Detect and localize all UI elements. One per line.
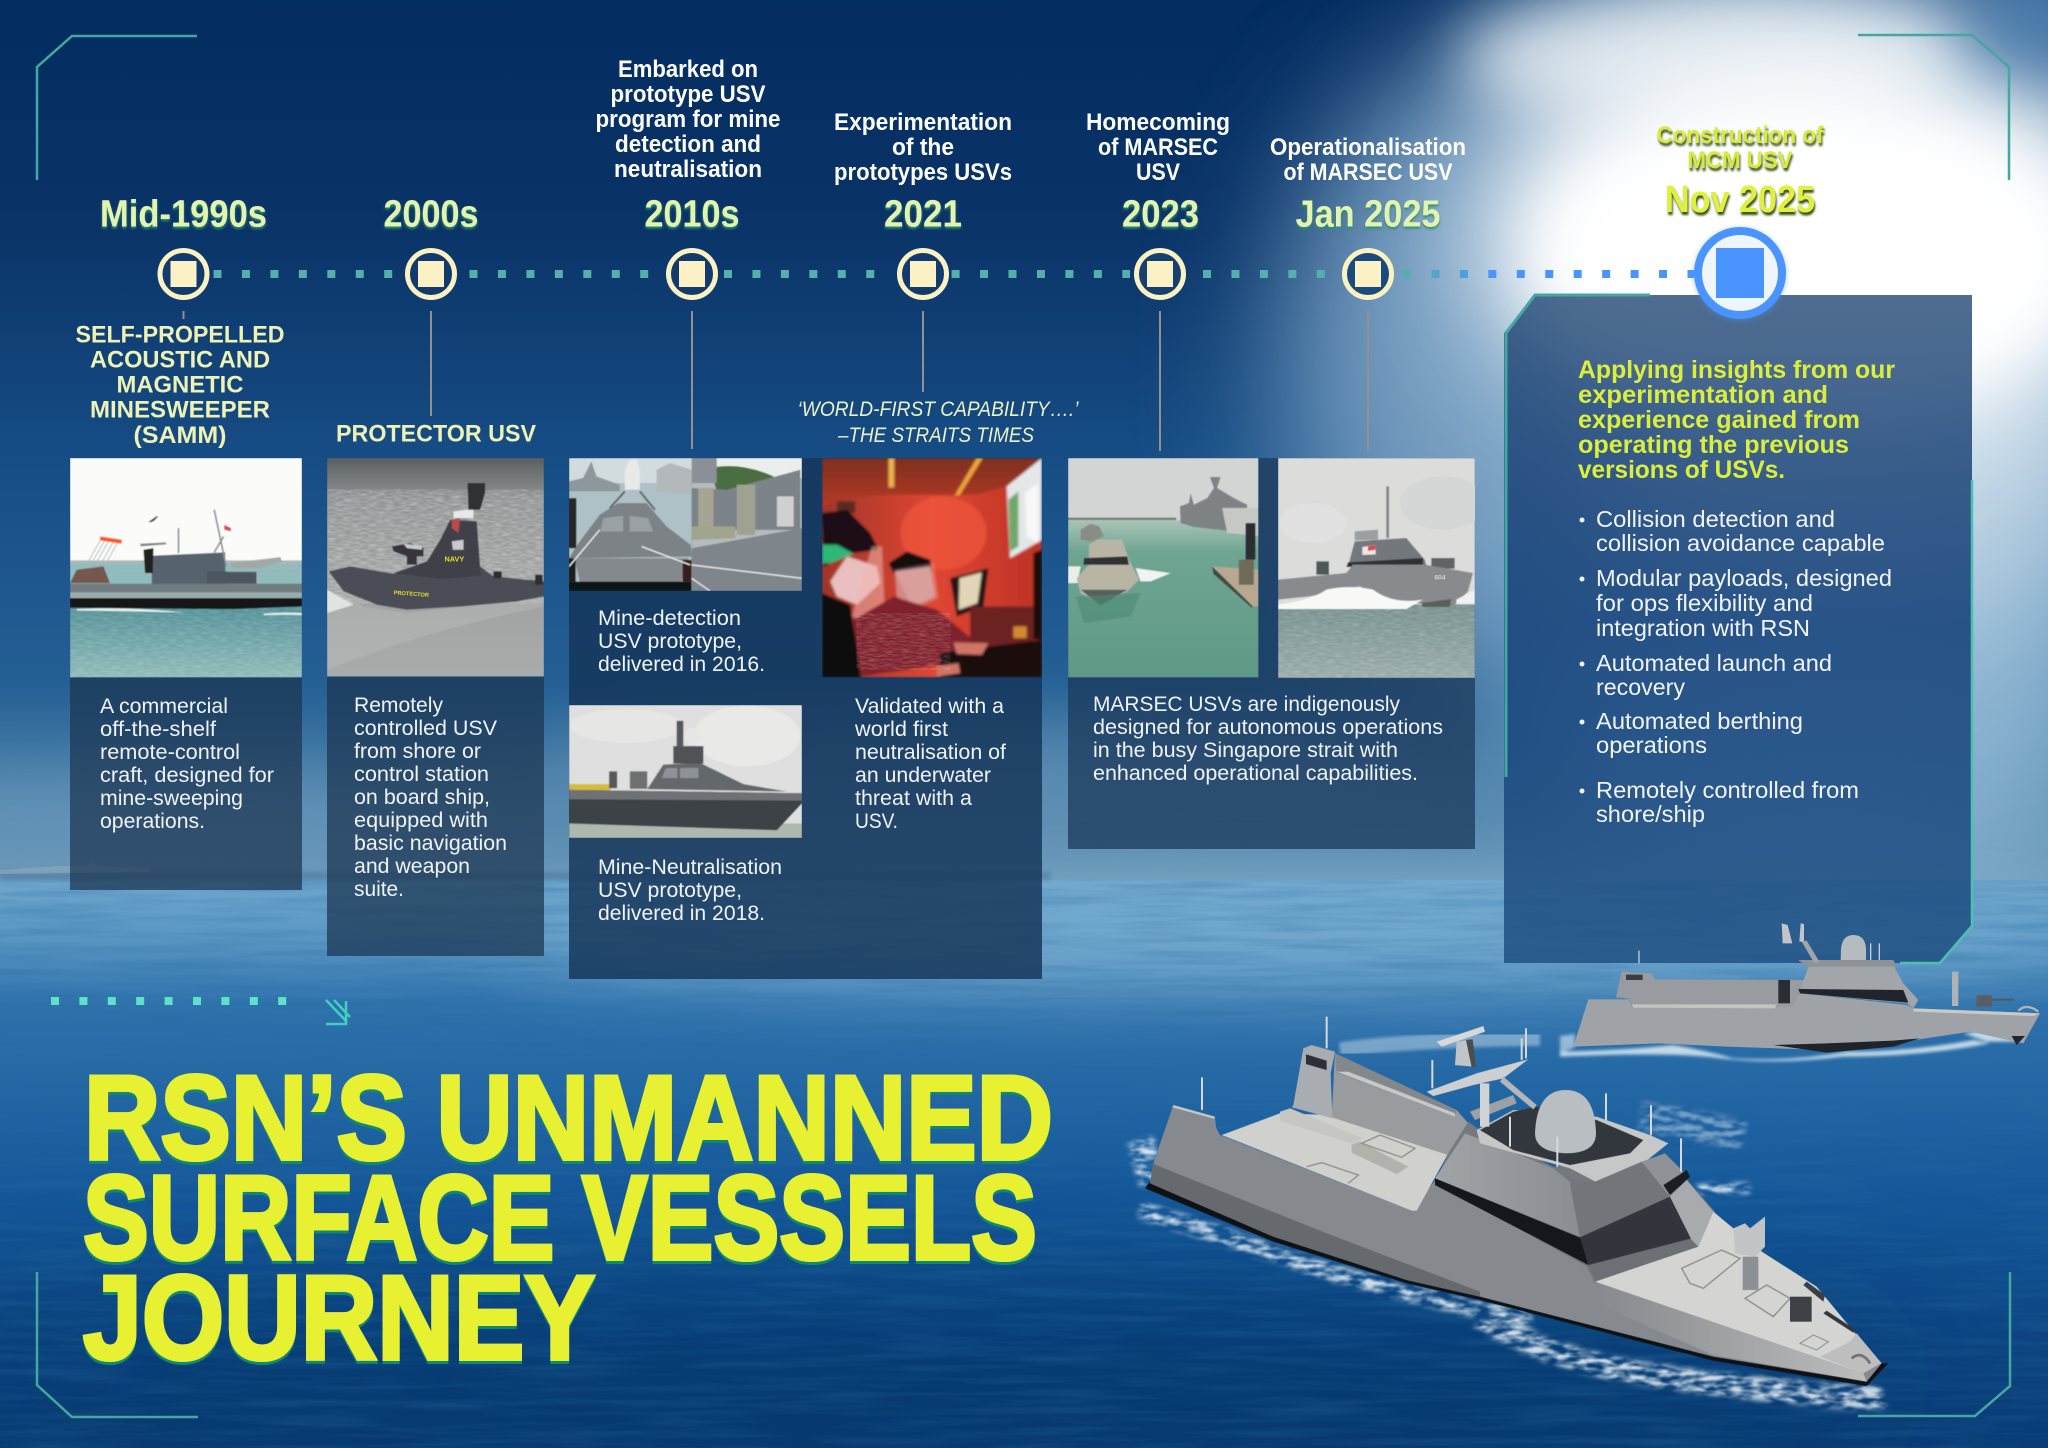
caption: Nov 2025: MCM USV [1688, 147, 1792, 174]
text: SAMM description: mine-sweeping [100, 787, 243, 810]
text: MARSEC description: enhanced operational capabilities. [1093, 762, 1418, 785]
caption: 2021: prototypes USVs [834, 159, 1012, 186]
text: 2021 validation: USV. [855, 810, 898, 833]
text: MCM USV intro: experience gained from [1578, 406, 1860, 434]
panel: mid-1990s text background [70, 677, 302, 890]
caption: 2010s: detection and [615, 131, 761, 158]
text: MCM USV intro [1578, 356, 1895, 484]
title: SURFACE VESSELS [83, 1151, 1037, 1285]
ship: rear MCM USV with wake [1560, 923, 2040, 1061]
caption: 2023: USV [1136, 159, 1180, 186]
text: SAMM description [100, 695, 274, 833]
year labels: 2021 [884, 194, 962, 236]
caption: 2021: of the [892, 134, 954, 161]
list: MCM USV capabilities: Modular payloads, designed [1596, 565, 1892, 591]
text: Protector description: on board ship, [354, 786, 490, 809]
photo: control room [822, 458, 1042, 678]
timeline node: Mid-1990s [160, 250, 207, 298]
timeline node: Nov 2025 [1693, 227, 1787, 321]
text: Protector description: basic navigation [354, 832, 507, 855]
caption: Jan 2025: of MARSEC USV [1284, 159, 1452, 186]
caption: 2010s: prototype USV [610, 81, 766, 108]
photo: SAMM minesweeper [70, 458, 302, 678]
text: 2021 validation: neutralisation of [855, 741, 1006, 764]
year labels: Jan 2025 [1296, 194, 1440, 236]
heading: SAMM: MINESWEEPER [90, 396, 270, 424]
caption: 2010s: program for mine [596, 106, 780, 133]
photo: Protector USV [327, 458, 544, 676]
text: Protector description [354, 694, 507, 901]
caption: Jan 2025 [1270, 134, 1466, 186]
list: MCM USV capabilities: shore/ship [1596, 801, 1705, 827]
caption: 2010s: neutralisation [614, 156, 762, 183]
timeline node: 2010s [668, 250, 716, 298]
text: mine-detection prototype: USV prototype, [598, 630, 742, 653]
list: MCM USV capabilities: Automated launch and [1596, 650, 1832, 676]
year labels: 2010s [644, 194, 740, 236]
list: MCM USV capabilities: for ops flexibility and [1596, 590, 1813, 616]
text: mine-neutralisation prototype: Mine-Neutralisation [598, 856, 782, 879]
photo: mine-detection USV prototype [569, 458, 802, 591]
photo: Protector USV: NAVY [444, 555, 464, 564]
text: SAMM description: A commercial [100, 695, 228, 718]
text: mine-detection prototype: delivered in 2016. [598, 653, 765, 676]
list: MCM USV capabilities: operations [1596, 732, 1707, 758]
list: MCM USV capabilities: integration with RSN [1596, 615, 1810, 641]
heading: SAMM: SELF-PROPELLED [76, 322, 284, 348]
text: SAMM description: craft, designed for [100, 764, 274, 787]
year labels: Nov 2025 [1665, 179, 1815, 221]
list: MCM USV capabilities [1580, 506, 1892, 827]
connector lines [184, 311, 1368, 451]
text: Protector description: control station [354, 763, 489, 786]
year labels [100, 179, 1815, 236]
list: MCM USV capabilities: Remotely controlled from [1596, 777, 1859, 803]
text: 2021 validation: threat with a [855, 787, 972, 810]
heading: Protector USV: PROTECTOR USV [336, 420, 536, 448]
text: MCM USV intro: Applying insights from our [1578, 356, 1895, 384]
text: 2021 validation: an underwater [855, 764, 991, 787]
panel: 2010s and 2021 background [569, 458, 1042, 979]
text: MCM USV intro: operating the previous [1578, 431, 1849, 459]
timeline node: 2000s [408, 250, 454, 298]
heading: SAMM: ACOUSTIC AND [90, 346, 270, 374]
heading: SAMM: (SAMM) [134, 422, 226, 449]
title: JOURNEY [83, 1251, 595, 1385]
year labels: Mid-1990s [100, 194, 267, 236]
caption: 2023: of MARSEC [1098, 134, 1218, 161]
panel: MCM USV [1504, 295, 1972, 963]
timeline node: 2021 [900, 250, 946, 298]
text: mine-neutralisation prototype: USV prototype, [598, 879, 742, 902]
photo: MARSEC USV underway [1278, 458, 1475, 678]
year labels: 2023 [1122, 194, 1199, 236]
quote: The Straits Times: ‘WORLD-FIRST CAPABILITY….’ [798, 398, 1079, 421]
heading: SAMM [76, 322, 284, 449]
quote: The Straits Times: –THE STRAITS TIMES [837, 424, 1034, 447]
text: Protector description: Remotely [354, 694, 443, 717]
photo: mine-neutralisation USV prototype [569, 705, 802, 838]
quote: The Straits Times [798, 398, 1079, 447]
text: mine-neutralisation prototype: delivered in 2018. [598, 902, 765, 925]
text: MARSEC description: designed for autonomous operations [1093, 716, 1443, 739]
text: MCM USV intro: experimentation and [1578, 381, 1828, 409]
text: SAMM description: remote-control [100, 741, 240, 764]
text: Protector description: from shore or [354, 740, 481, 763]
list: MCM USV capabilities: Collision detection and [1596, 506, 1835, 532]
text: Protector description: suite. [354, 878, 404, 901]
text: Protector description: and weapon [354, 855, 470, 878]
timeline node: Jan 2025 [1344, 250, 1392, 298]
caption: Nov 2025: Construction of [1656, 122, 1824, 149]
heading: SAMM: MAGNETIC [116, 372, 244, 398]
caption: 2010s: Embarked on [618, 56, 758, 83]
caption: 2021: Experimentation [834, 109, 1012, 136]
title [83, 1051, 1053, 1385]
timeline dotted line [214, 274, 1694, 280]
text: 2021 validation: Validated with a [855, 695, 1004, 718]
text: Protector description: equipped with [354, 809, 488, 832]
timeline node: 2023 [1136, 250, 1184, 298]
text: mine-neutralisation prototype [598, 856, 782, 925]
text: SAMM description: operations. [100, 810, 205, 833]
decorative dashes and arrow [51, 1000, 350, 1024]
text: Protector description: controlled USV [354, 717, 497, 740]
caption: Nov 2025 [1656, 122, 1824, 174]
caption: 2010s [596, 56, 780, 183]
year labels: 2000s [384, 194, 478, 236]
ship: foreground MCM USV with wake [1140, 1017, 1888, 1397]
photo: MARSEC USV at pier [1068, 458, 1258, 678]
caption: Jan 2025: Operationalisation [1270, 134, 1466, 161]
photo: MARSEC USV underway: 604 [1434, 575, 1446, 582]
panel: 2000s text background [327, 677, 544, 956]
list: MCM USV capabilities: collision avoidance capable [1596, 530, 1885, 556]
panel: MARSEC background [1068, 458, 1475, 849]
text: MCM USV intro: versions of USVs. [1578, 456, 1785, 484]
title: RSN’S UNMANNED [84, 1051, 1053, 1185]
list: MCM USV capabilities: recovery [1596, 674, 1685, 700]
list: MCM USV capabilities: Automated berthing [1596, 708, 1803, 734]
text: SAMM description: off-the-shelf [100, 718, 216, 741]
text: mine-detection prototype: Mine-detection [598, 607, 741, 630]
text: MARSEC description: MARSEC USVs are indigenously [1093, 693, 1400, 716]
text: 2021 validation: world first [854, 718, 948, 741]
photo: Protector USV: PROTECTOR [393, 590, 429, 599]
text: 2021 validation [854, 695, 1006, 833]
text: MARSEC description [1093, 693, 1443, 785]
caption: 2021 [834, 109, 1012, 186]
caption: 2023 [1086, 109, 1230, 186]
caption: 2023: Homecoming [1086, 109, 1230, 136]
text: mine-detection prototype [598, 607, 765, 676]
text: MARSEC description: in the busy Singapore strait with [1093, 739, 1398, 762]
